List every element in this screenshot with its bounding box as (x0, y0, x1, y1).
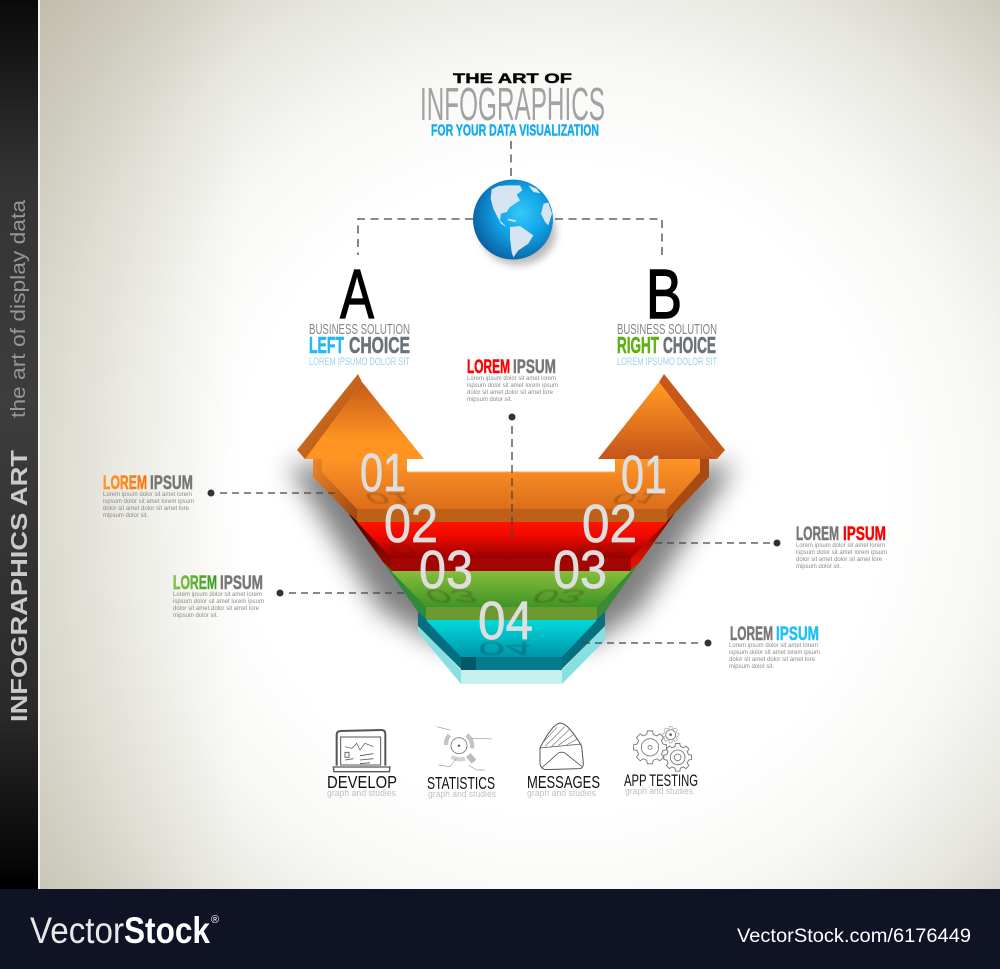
digit reflections: 01 (606, 490, 666, 507)
callout: right red: LOREM (796, 524, 839, 545)
digit reflections: 02 (384, 541, 444, 558)
callout: left green: IPSUM (220, 573, 263, 594)
label: app testing (624, 771, 698, 796)
heading: B right choice: BUSINESS SOLUTION (617, 322, 717, 338)
red band (348, 513, 675, 571)
callout: left orange: IPSUM (150, 473, 193, 494)
label: statistics (427, 773, 496, 799)
footer logo: VectorStock (30, 910, 225, 951)
digit reflections: 02 (572, 541, 632, 558)
digit reflections: 04 (478, 638, 532, 659)
heading: A left choice (309, 255, 410, 368)
step numbers: 02 (582, 494, 637, 554)
title: INFOGRAPHICS (420, 78, 605, 130)
title: FOR YOUR DATA VISUALIZATION (431, 122, 599, 140)
digit reflections: 03 (527, 586, 591, 606)
callout: left orange: dolor sit amet dolor sit amet lore (103, 505, 189, 512)
digit reflections (359, 490, 666, 659)
heading: B right choice (617, 255, 717, 368)
green band (383, 562, 640, 620)
callout: left orange: Lorem ipsum dolor sit amet lorem (103, 491, 192, 498)
connector (208, 490, 335, 496)
callout: left green (173, 573, 405, 619)
label: messages: graph and studies (527, 788, 596, 798)
heading: A left choice: A (340, 255, 374, 333)
digit reflections: 03 (419, 586, 483, 606)
footer id: VectorStock.com/6176449 (737, 926, 971, 947)
step numbers: 04 (478, 591, 533, 651)
icon: app testing gears (634, 726, 691, 771)
callout: left green: dolor sit amet dolor sit amet lore (173, 605, 259, 612)
callout: left orange: ispsum dolor sit amet lorem ipsum (103, 498, 194, 505)
center connector (508, 414, 516, 541)
digit reflections: 01 (359, 490, 419, 507)
heading: A left choice: CHOICE (349, 332, 410, 358)
callout: left green: LOREM (173, 573, 217, 594)
sidebar title: INFOGRAPHICS ART (6, 450, 32, 722)
title: THE ART OF (453, 70, 573, 86)
callout: right red (655, 524, 887, 570)
icon: develop laptop (333, 730, 390, 772)
icon: statistics (437, 727, 492, 770)
label: statistics: graph and studies (428, 789, 496, 799)
label: develop: DEVELOP (327, 772, 397, 792)
heading: A left choice: LEFT (309, 332, 344, 358)
funnel shadow (288, 465, 735, 645)
label: app testing: graph and studies (625, 786, 693, 796)
label: develop (327, 772, 397, 798)
heading: A left choice: LOREM IPSUMO DOLOR SIT (309, 356, 410, 368)
callout: right cyan (583, 624, 820, 670)
heading: B right choice: B (646, 255, 682, 333)
callout: center red: IPSUM (513, 357, 556, 378)
heading: B right choice: CHOICE (663, 332, 716, 358)
label: messages: MESSAGES (527, 772, 600, 792)
heading: A left choice: BUSINESS SOLUTION (309, 322, 410, 338)
callout: center red: mipsum dolor sit. (467, 396, 512, 403)
step numbers: 02 (384, 494, 438, 554)
callout: center red: dolor sit amet dolor sit amet lore (467, 389, 553, 396)
callout: left orange: mipsum dolor sit. (103, 512, 148, 519)
connector (655, 540, 780, 546)
cyan band (418, 612, 605, 684)
left sidebar (0, 0, 40, 889)
footer bar (0, 889, 1000, 969)
right arrow head (598, 374, 725, 459)
callout: center red (467, 357, 558, 403)
label: messages (527, 772, 600, 798)
callout: right red: Lorem ipsum dolor sit amet lorem (796, 542, 885, 549)
heading: B right choice: LOREM IPSUMO DOLOR SIT (617, 356, 717, 368)
label: statistics: STATISTICS (427, 773, 495, 793)
left arrow head (297, 374, 424, 459)
footer logo: ® (211, 914, 219, 926)
callout: right cyan: mipsum dolor sit. (729, 663, 774, 670)
orange band (313, 459, 709, 522)
callout: right red: mipsum dolor sit. (796, 563, 841, 570)
callout: right red: dolor sit amet dolor sit amet lore (796, 556, 882, 563)
connector (276, 590, 405, 596)
step numbers: 03 (419, 540, 473, 600)
callout: right cyan: ispsum dolor sit amet lorem ipsum (729, 649, 820, 656)
funnel arrow chart (288, 374, 735, 684)
callout: right red: ispsum dolor sit amet lorem ipsum (796, 549, 887, 556)
callout: right cyan: dolor sit amet dolor sit amet lore (729, 656, 815, 663)
step numbers (360, 443, 667, 651)
step numbers: 03 (553, 540, 607, 600)
callout: center red: ispsum dolor sit amet lorem ipsum (467, 382, 558, 389)
callout: right cyan: Lorem ipsum dolor sit amet lorem (729, 642, 818, 649)
icon row (327, 723, 698, 799)
callout: left orange (103, 473, 335, 519)
heading: B right choice: RIGHT (617, 332, 659, 358)
label: app testing: APP TESTING (624, 771, 698, 790)
sidebar tagline: the art of display data (8, 199, 30, 418)
callout: left green: mipsum dolor sit. (173, 612, 218, 619)
callout: right cyan: IPSUM (776, 624, 819, 645)
callout: right red: IPSUM (843, 524, 886, 545)
callout: left green: ispsum dolor sit amet lorem ipsum (173, 598, 264, 605)
icon: globe (473, 180, 556, 265)
callout: left orange: LOREM (103, 473, 147, 494)
step numbers: 01 (360, 443, 406, 503)
label: develop: graph and studies (327, 788, 396, 798)
callout: right cyan: LOREM (730, 624, 773, 645)
callout: left green: Lorem ipsum dolor sit amet lorem (173, 591, 262, 598)
callout: center red: LOREM (467, 357, 510, 378)
icon: messages envelope (540, 723, 583, 770)
step numbers: 01 (621, 445, 667, 505)
connector (583, 640, 712, 646)
title (420, 70, 605, 140)
callout: center red: Lorem ipsum dolor sit amet lorem (467, 375, 556, 382)
